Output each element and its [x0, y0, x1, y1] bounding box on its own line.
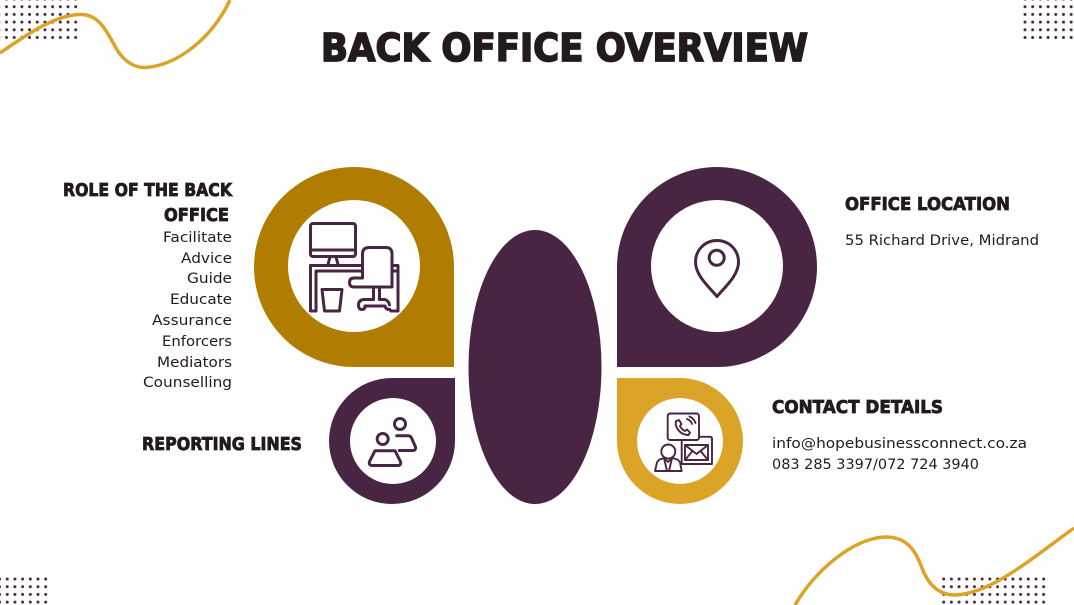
- text block: role list: Facilitate: [163, 230, 232, 246]
- panel: reporting lines: [329, 378, 455, 504]
- icon: two people: [369, 418, 416, 466]
- text block: role list: [143, 230, 232, 391]
- text block: role list: Enforcers: [162, 334, 232, 350]
- text block: role list: Educate: [170, 292, 232, 308]
- panel: contact details: [617, 378, 743, 504]
- text block: address: 55 Richard Drive, Midrand: [845, 233, 1039, 249]
- dot pattern: top left: [0, 0, 80, 41]
- decorative curve: bottom right: [795, 528, 1074, 605]
- heading: role of the back office: [63, 180, 233, 226]
- icon: phone, mail and person: [655, 414, 712, 471]
- dot pattern: bottom left: [0, 575, 49, 605]
- heading: reporting lines: REPORTING LINES: [142, 434, 302, 455]
- text block: role list: Mediators: [157, 355, 232, 371]
- panel: office location: [617, 167, 817, 367]
- text block: role list: Counselling: [143, 375, 232, 391]
- dot pattern: top right: [1021, 0, 1074, 41]
- heading: role of the back office: ROLE OF THE BACK: [63, 180, 233, 201]
- heading: contact details: CONTACT DETAILS: [772, 397, 943, 418]
- text block: contact information: info@hopebusinessconnect.co.za: [772, 436, 1027, 452]
- icon: office desk and chair: [310, 224, 398, 311]
- text block: role list: Advice: [181, 251, 232, 267]
- heading: role of the back office: OFFICE: [164, 205, 229, 226]
- dot pattern: bottom right: [940, 575, 1048, 605]
- text block: contact information: 083 285 3397/072 724 3940: [772, 457, 979, 473]
- text block: role list: Guide: [187, 271, 232, 287]
- icon: map pin: [696, 240, 738, 296]
- decorative curve: top left: [0, 0, 230, 68]
- title: BACK OFFICE OVERVIEW: [321, 26, 808, 71]
- text block: role list: Assurance: [152, 313, 232, 329]
- heading: office location: OFFICE LOCATION: [845, 194, 1010, 215]
- panel: central ellipse: [468, 230, 602, 504]
- panel: role of the back office: [254, 167, 454, 367]
- text block: contact information: [772, 436, 1027, 473]
